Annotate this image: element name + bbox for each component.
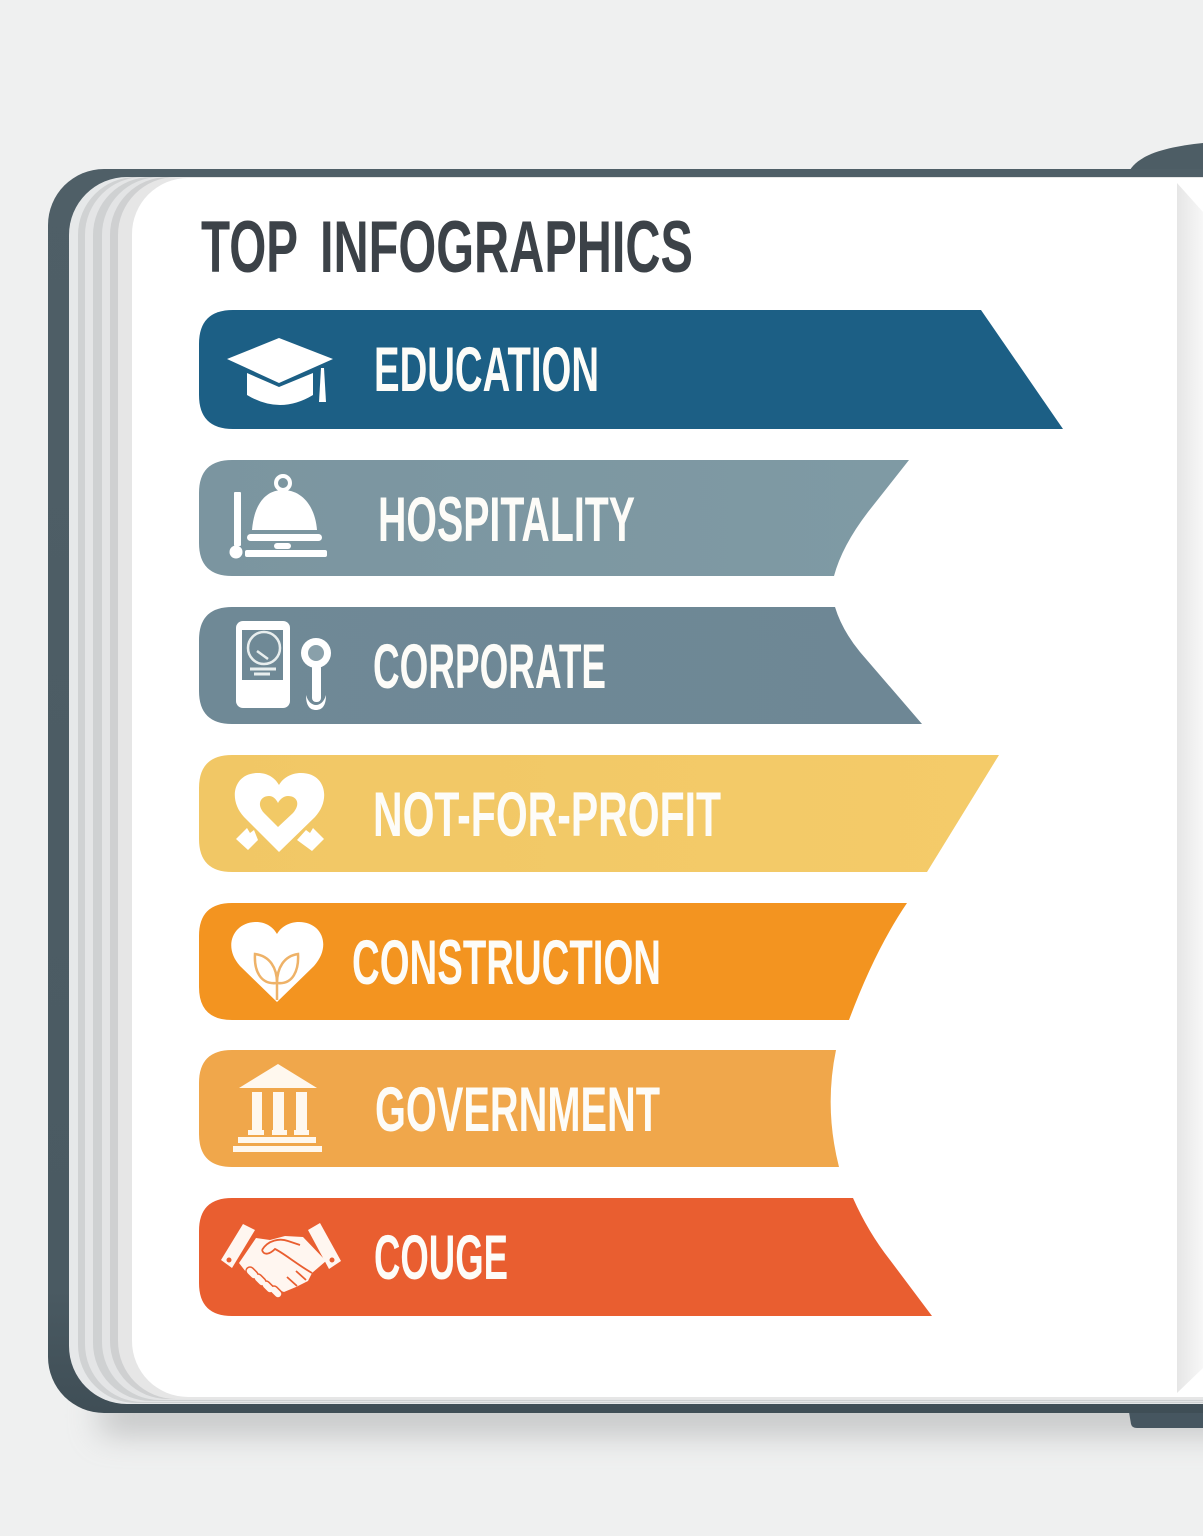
banner: couge	[199, 1198, 932, 1316]
book shadow	[100, 1398, 1203, 1434]
title: TOP	[201, 207, 298, 288]
banner: government	[199, 1050, 839, 1167]
book cover	[48, 169, 1203, 1413]
title	[201, 207, 693, 288]
page stack	[69, 177, 1203, 1404]
icon: columned building	[233, 1064, 322, 1152]
icon: phone and key	[236, 621, 331, 710]
icon: handshake	[221, 1223, 341, 1294]
icon: service bell	[230, 476, 327, 558]
icon: graduation cap	[227, 338, 333, 405]
label: corporate: CORPORATE	[373, 632, 606, 702]
label: education: EDUCATION	[374, 335, 599, 405]
label: hospitality: HOSPITALITY	[378, 485, 635, 555]
banner: corporate	[199, 607, 922, 724]
icon: heart with sprout	[231, 922, 323, 1002]
banner: education	[199, 310, 1063, 429]
right page fold	[1177, 183, 1203, 1393]
label: government: GOVERNMENT	[375, 1075, 660, 1145]
label: construction: CONSTRUCTION	[352, 928, 661, 998]
title: INFOGRAPHICS	[320, 207, 693, 288]
label: couge: COUGE	[374, 1223, 508, 1293]
bottom right cover tab	[1127, 1400, 1203, 1428]
banner: construction	[199, 903, 907, 1020]
white page	[132, 178, 1203, 1397]
label: not-for-profit: NOT-FOR-PROFIT	[373, 780, 721, 850]
icon: heart with ribbons	[235, 773, 324, 852]
top right cover tab	[1127, 143, 1203, 180]
banner: hospitality	[199, 460, 909, 576]
banner: not-for-profit	[199, 755, 999, 872]
